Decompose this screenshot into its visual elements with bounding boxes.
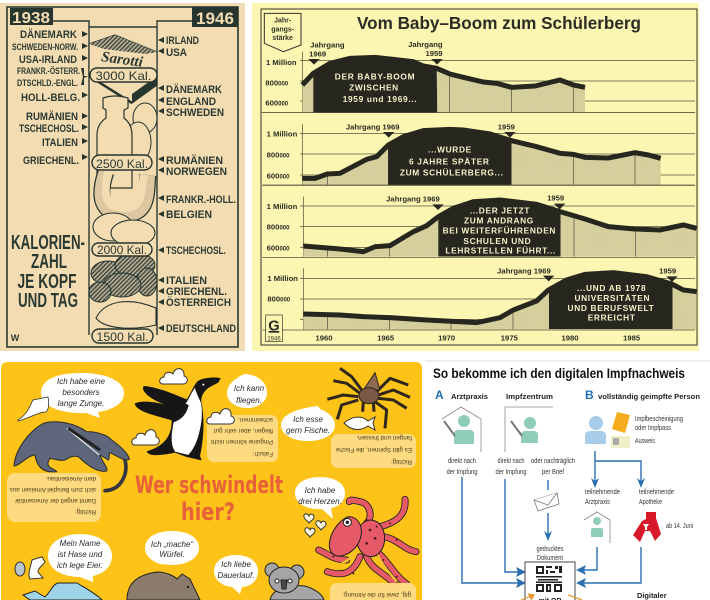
illustration: eggs (125, 103, 157, 162)
panel: Kalorienzahl 1938 und 1946 (0, 3, 245, 351)
answer box: anteater: dem Ameisenbau. (45, 475, 96, 482)
country labels 1938: FRANKR.-ÖSTERR. (17, 66, 80, 76)
chart row 4: ...UND AB 1978 (577, 283, 646, 293)
illustration: Sarotti chocolate: Sarotti (100, 49, 145, 71)
chart row 3: BEI WEITERFÜHRENDEN (443, 226, 556, 236)
chart row 4: UNIVERSITÄTEN (574, 293, 650, 303)
chart row 4: UND BERUFSWELT (568, 303, 654, 313)
section B header (585, 388, 700, 402)
speech bubble: penguin: fliegen. (236, 396, 262, 405)
chart row 4: Jahrgang 1969 (497, 267, 551, 276)
speech bubble: spider (281, 406, 335, 441)
chart row 3: LEHRSTELLEN FÜHRT... (445, 246, 556, 256)
chart row 1: 1959 und 1969... (343, 94, 417, 104)
speech bubble: platypus: Mein Name (60, 539, 101, 548)
country labels 1938: DTSCHLD.-ENGL. (17, 78, 78, 88)
text: A captions: direkt nach (448, 458, 476, 465)
text: digital: Digitaler (637, 591, 667, 600)
section A header: Arztpraxis (451, 392, 488, 401)
chart row 3: 1959 (547, 194, 564, 203)
country labels 1946: ÖSTERREICH (166, 296, 231, 309)
answer box: octopus (330, 583, 416, 600)
arrowheads: flow (516, 478, 645, 588)
illustration: platypus (23, 583, 102, 600)
chart row 1: 1969 (309, 49, 326, 58)
arrows 1946 (158, 37, 164, 331)
chart row 2: ZUM SCHÜLERBERG... (400, 168, 503, 178)
illustration: penguin (135, 377, 221, 460)
icon: participating practice (584, 512, 610, 543)
answer box: penguin (207, 415, 278, 462)
speech bubble: anteater: lange Zunge. (58, 399, 104, 408)
illustration: fish (96, 302, 156, 328)
text: participating practice and pharmacy: teilnehmende (585, 489, 620, 496)
chart row 3: 1 Million (267, 202, 298, 211)
country labels 1946: RUMÄNIEN (166, 154, 223, 167)
x axis years (315, 334, 641, 343)
section A header: A (435, 388, 444, 402)
chart row 4: 1959 (659, 267, 676, 276)
text: participating practice and pharmacy: teilnehmende (639, 489, 674, 496)
text: Kalorienzahl je Kopf und Tag (11, 232, 85, 312)
country labels 1938: HOLL-BELG. (21, 92, 80, 104)
illustration: bread (93, 213, 155, 246)
text: A captions: per Brief (542, 469, 564, 476)
chart row 1: 1 Million (266, 58, 297, 67)
speech bubble: penguin: Ich kann (234, 384, 265, 393)
title: Wer schwindelt hier: hier? (181, 498, 235, 526)
illustration: milk bottle (97, 96, 132, 188)
country labels 1938: RUMÄNIEN (26, 110, 78, 123)
pill: 1500 Kal.: 1500 Kal. (96, 330, 148, 344)
arrows 1938 (81, 31, 88, 160)
answer box: anteater: Damit angelt der Ameisenbär (15, 497, 96, 504)
chart title: Vom Baby–Boom zum Schülerberg (357, 13, 641, 33)
chart row 2 (262, 113, 695, 185)
text: documents: oder Impfpass (635, 425, 671, 432)
icon: pharmacy A (633, 512, 661, 542)
country labels 1946: IRLAND (166, 35, 199, 47)
cloud over answer box (207, 409, 234, 424)
text: participating practice and pharmacy: Apotheke (639, 499, 662, 506)
title: Wer schwindelt hier (135, 471, 283, 526)
illustration: sausage (102, 172, 148, 214)
chart row 2: 800000 (267, 151, 290, 160)
icon: vaccination card (612, 412, 630, 433)
chart row 1: 600000 (265, 99, 289, 108)
speech bubble: platypus (48, 534, 112, 582)
chart row 1: ZWISCHEN (349, 83, 399, 93)
country labels 1946: NORWEGEN (166, 166, 227, 178)
country labels 1946: DÄNEMARK (166, 83, 222, 96)
section A header: Impfzentrum (506, 392, 553, 401)
chart row 2: ...WURDE (428, 145, 472, 155)
chart row 1: Jahrgang (310, 40, 345, 49)
icon: person (585, 416, 606, 444)
arrows: orange (521, 594, 582, 600)
x axis years: 1985 (623, 334, 641, 343)
speech bubble: spider: Ich esse (293, 415, 323, 424)
text: from 14 June: ab 14. Juni (666, 523, 693, 530)
answer box: octopus: gig, zwei für die Atmung. (342, 591, 411, 598)
country labels 1938: ITALIEN (42, 137, 78, 149)
speech bubble: koala: Ich liebe (221, 560, 251, 569)
panel: Vom Baby-Boom zum Schülerberg (252, 3, 699, 351)
speech bubble: octopus: drei Herzen. (298, 497, 342, 506)
speech bubble: platypus: ist Hase und (58, 550, 103, 559)
x axis years: 1980 (561, 334, 579, 343)
chart row 1: Jahrgang (408, 40, 443, 49)
answer box: penguin: Falsch: (252, 450, 273, 457)
speech bubble: penguin (227, 374, 267, 408)
badge: Jahrgangsstärke: gangs- (271, 26, 295, 33)
answer box: spider (331, 434, 416, 468)
country labels 1946: BELGIEN (166, 209, 212, 221)
icon: envelope (534, 493, 559, 511)
speech bubble: koala: Dauerlauf. (218, 571, 254, 580)
pill: 2000 Kal.: 2000 Kal. (97, 243, 147, 257)
speech bubble: wombat (145, 531, 199, 565)
illustration: koala (265, 563, 324, 600)
illustration: octopus (319, 499, 416, 593)
chart row 1: 800000 (265, 79, 289, 88)
answer box: penguin: schwimmen. (238, 416, 273, 423)
country labels 1946: ENGLAND (166, 96, 216, 108)
country labels 1946: TSCHECHOSL. (166, 245, 226, 257)
illustration: wombat (127, 572, 200, 600)
answer box: anteater: sich zum Beispiel Ameisen aus (10, 486, 96, 493)
year box 1938: 1938 (12, 10, 50, 27)
chart row 3: ...DER JETZT (470, 205, 530, 215)
country labels 1946 (166, 35, 236, 335)
document with QR code (525, 562, 575, 600)
text: printed document: gedrucktes (536, 546, 564, 553)
panel: Wer schwindelt hier? (1, 362, 422, 600)
chart row 3 (262, 185, 697, 257)
country labels 1938: SCHWEDEN-NORW. (12, 42, 78, 52)
chart row 1: DER BABY-BOOM (335, 71, 415, 81)
section B header: vollständig geimpfte Person (598, 392, 700, 401)
chart row 3: 800000 (267, 223, 290, 232)
illustration: clouds (132, 369, 187, 445)
country labels 1938 (12, 28, 80, 167)
speech bubble: anteater: besonders (62, 388, 100, 397)
country labels 1938: TSCHECHOSL. (19, 123, 79, 135)
chart row 4: 800000 (267, 295, 291, 304)
logo: Globus 1946 (266, 315, 282, 342)
illustration: anteater (14, 422, 129, 491)
panel: digitaler Impfnachweis (425, 360, 710, 600)
logo: Globus 1946: 1946 (267, 336, 281, 342)
text: participating practice and pharmacy: Arztpraxis (585, 499, 610, 506)
country labels 1946: USA (166, 47, 187, 59)
country labels 1946: GRIECHENL. (166, 286, 227, 298)
illustration: Sarotti chocolate (89, 35, 157, 103)
speech bubble: anteater (41, 373, 124, 418)
badge: Jahrgangsstärke: Jahr- (274, 18, 292, 25)
country labels 1946: ITALIEN (166, 275, 207, 287)
text: A captions: oder nachträglich (531, 458, 575, 465)
calorie column (53, 21, 192, 335)
speech bubble: anteater: Ich habe eine (57, 377, 106, 386)
chart row 1: 1959 (425, 49, 443, 58)
arrows: flow (462, 451, 641, 583)
text: documents: Impfbescheinigung (635, 416, 683, 423)
answer box: penguin: Pinguine können nicht (211, 438, 273, 445)
logo: artist mark: W (11, 333, 20, 343)
answer box: anteater: Richtig: (75, 508, 96, 515)
chart row 3: ZUM ANDRANG (464, 215, 534, 225)
speech bubble: koala (214, 555, 258, 594)
chart row 1 (263, 40, 695, 113)
text: A captions: der Impfung (496, 469, 527, 476)
chart row 4: ERREICHT (588, 313, 636, 323)
country labels 1938: DÄNEMARK (20, 28, 77, 41)
speech bubble: octopus: Ich habe (305, 486, 336, 495)
pill: 2500 Kal.: 2500 Kal. (96, 157, 148, 171)
x axis years: 1975 (501, 334, 519, 343)
chart row 4: 1 Million (267, 274, 298, 283)
icon: bunny and egg (15, 557, 45, 579)
answer box: anteater (7, 473, 101, 522)
text: A captions: direkt nach (498, 458, 525, 465)
chart row 4 (262, 267, 697, 330)
icon: fish (344, 417, 375, 430)
icon: tape measure (18, 397, 49, 421)
x axis years: 1970 (438, 334, 455, 343)
icon: doctor in vaccination centre (505, 407, 553, 452)
title: Wer schwindelt hier: Wer schwindelt (135, 471, 283, 499)
chart row 3: 600000 (267, 243, 290, 252)
chart row 3: Jahrgang 1969 (386, 194, 440, 203)
year box 1946: 1946 (196, 9, 234, 28)
text: printed document: Dokument (537, 555, 563, 562)
text: documents: Ausweis (635, 438, 655, 445)
x axis years: 1960 (315, 334, 333, 343)
speech bubble: wombat: Ich „mache“ (151, 540, 193, 549)
text: documents (635, 416, 683, 445)
text: Kalorienzahl je Kopf und Tag: JE KOPF (18, 271, 76, 293)
answer box: spider: Es gibt Spinnen, die Fische (335, 446, 412, 453)
speech bubble: platypus: ich lege Eier. (57, 561, 103, 570)
speech bubble: wombat: Würfel. (159, 550, 185, 559)
icon: hearts (304, 514, 326, 537)
icon: doctor in practice (442, 407, 481, 452)
speech bubble: spider: gern Fische. (286, 426, 330, 435)
illustration: potatoes (89, 253, 157, 302)
x axis years: 1965 (377, 334, 395, 343)
chart row 2: 1959 (498, 122, 515, 131)
text: A captions (446, 458, 575, 476)
pill: 3000 Kal.: 3000 Kal. (96, 69, 152, 83)
answer box: penguin: fliegen, aber sehr gut (214, 427, 273, 434)
country labels 1938: GRIECHENL. (23, 155, 79, 167)
answer box: spider: Richtig: (391, 458, 412, 465)
answer box: spider: fangen und fressen. (356, 434, 412, 441)
chart row 2: 1 Million (267, 130, 298, 139)
country labels 1946: SCHWEDEN (166, 107, 224, 119)
icon: ID card (611, 436, 630, 448)
chart row 2: Jahrgang 1969 (346, 122, 399, 131)
text: Kalorienzahl je Kopf und Tag: KALORIEN- (11, 232, 85, 254)
logo: Globus 1946: G (268, 318, 280, 334)
country labels 1938: USA-IRLAND (19, 54, 77, 66)
text: A captions: der Impfung (446, 469, 478, 476)
text: participating practice and pharmacy (585, 489, 674, 506)
chart row 2: 6 JAHRE SPÄTER (409, 156, 490, 166)
text: Kalorienzahl je Kopf und Tag: ZAHL (31, 251, 67, 273)
country labels 1946: FRANKR.-HOLL. (166, 194, 236, 206)
section B header: B (585, 388, 594, 402)
chart row 3: SCHULEN UND (463, 236, 531, 246)
badge: Jahrgangsstärke: stärke (272, 35, 293, 42)
text: Kalorienzahl je Kopf und Tag: UND TAG (18, 290, 78, 312)
illustration: spider (327, 368, 410, 428)
text: printed document (536, 546, 564, 562)
speech bubble: octopus (295, 477, 345, 519)
chart row 2: 600000 (267, 171, 290, 180)
badge: Jahrgangsstärke (264, 13, 301, 52)
section A header (435, 388, 553, 402)
country labels 1946: DEUTSCHLAND (166, 323, 236, 335)
